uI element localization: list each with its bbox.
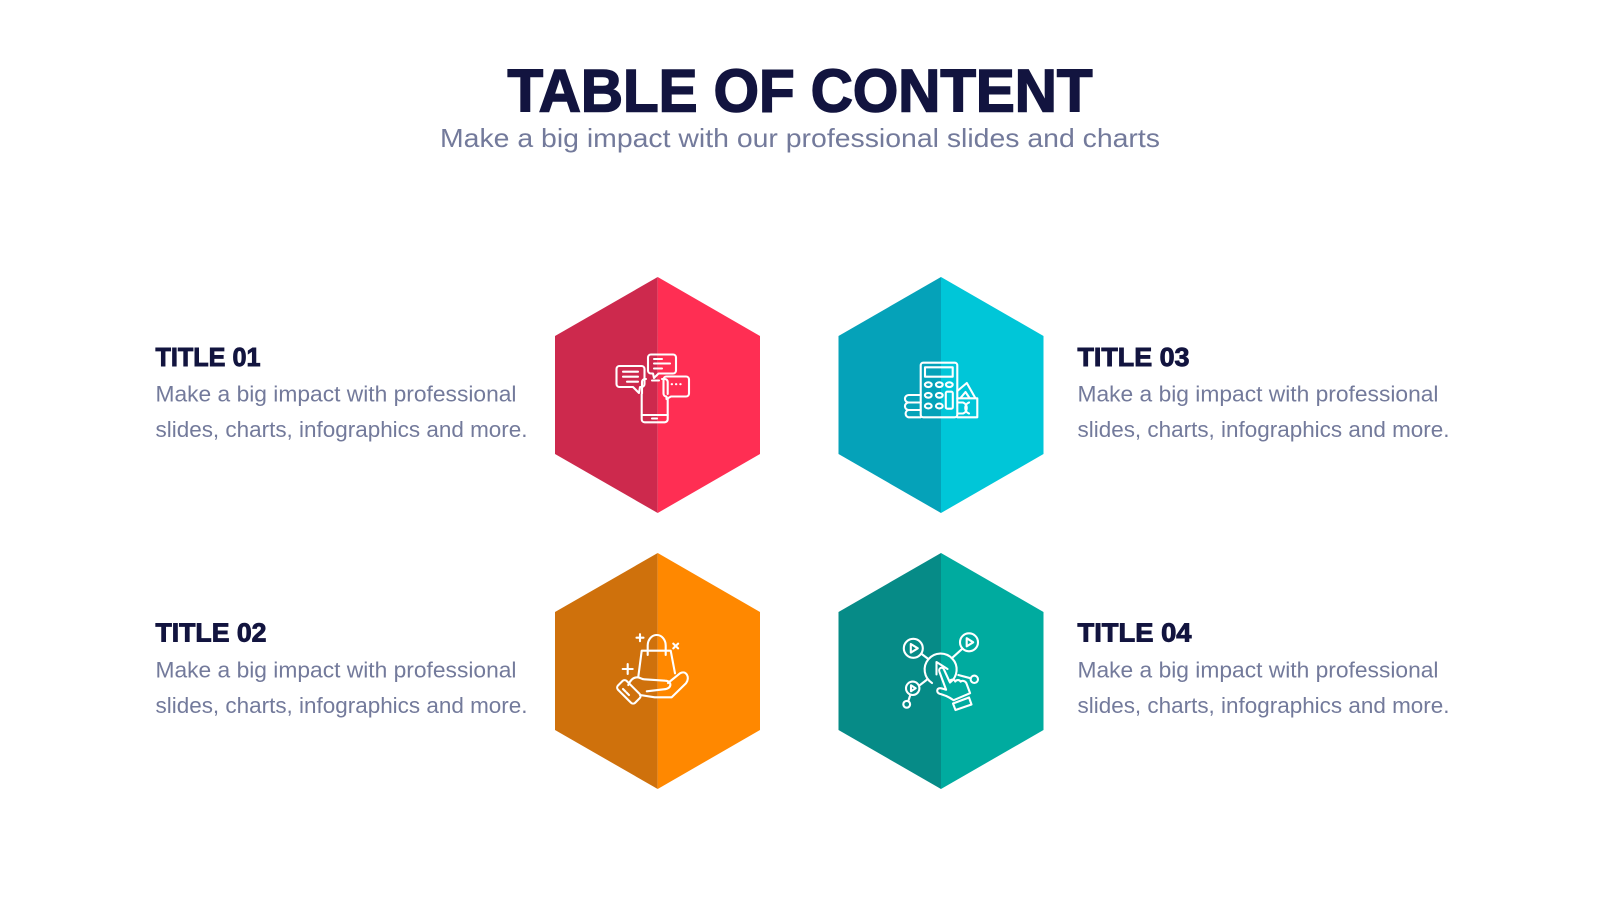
hexagon: cyan [838, 277, 1044, 513]
panel: title 04 text: Make a big impact with professional [1078, 658, 1438, 682]
icon: hand holding shopping bag [617, 634, 688, 704]
panel: title 03 text: slides, charts, infographics and more. [1078, 417, 1450, 442]
panel: title 02 text: slides, charts, infographics and more. [156, 693, 528, 718]
subtitle: Make a big impact with our professional slides and charts [440, 123, 1160, 153]
panel: title 01 text: Make a big impact with professional [156, 382, 516, 406]
panel: title 03 text: TITLE 03 [1078, 342, 1190, 372]
panel: title 01 text: slides, charts, infographics and more. [156, 417, 528, 442]
panel: title 04 text: TITLE 04 [1078, 618, 1192, 648]
hexagon: teal [838, 553, 1044, 789]
panel: title 02 text: Make a big impact with professional [156, 658, 516, 682]
panel: title 03 text: Make a big impact with professional [1078, 382, 1438, 406]
icon: calculator, coins and cash [905, 363, 977, 417]
panel: title 03 text [1078, 342, 1450, 442]
icon: hand tapping connected play buttons [903, 633, 978, 710]
panel: title 02 text: TITLE 02 [156, 618, 266, 648]
icon: phone with chat bubbles [616, 354, 689, 422]
panel: title 02 text [156, 618, 528, 718]
title: TABLE OF CONTENT [508, 58, 1092, 124]
panel: title 01 text: TITLE 01 [156, 342, 260, 372]
panel: title 01 text [156, 342, 528, 442]
panel: title 04 text: slides, charts, infographics and more. [1078, 693, 1450, 718]
hexagon: orange [555, 553, 760, 789]
panel: title 04 text [1078, 618, 1450, 718]
hexagon: red [555, 277, 760, 513]
